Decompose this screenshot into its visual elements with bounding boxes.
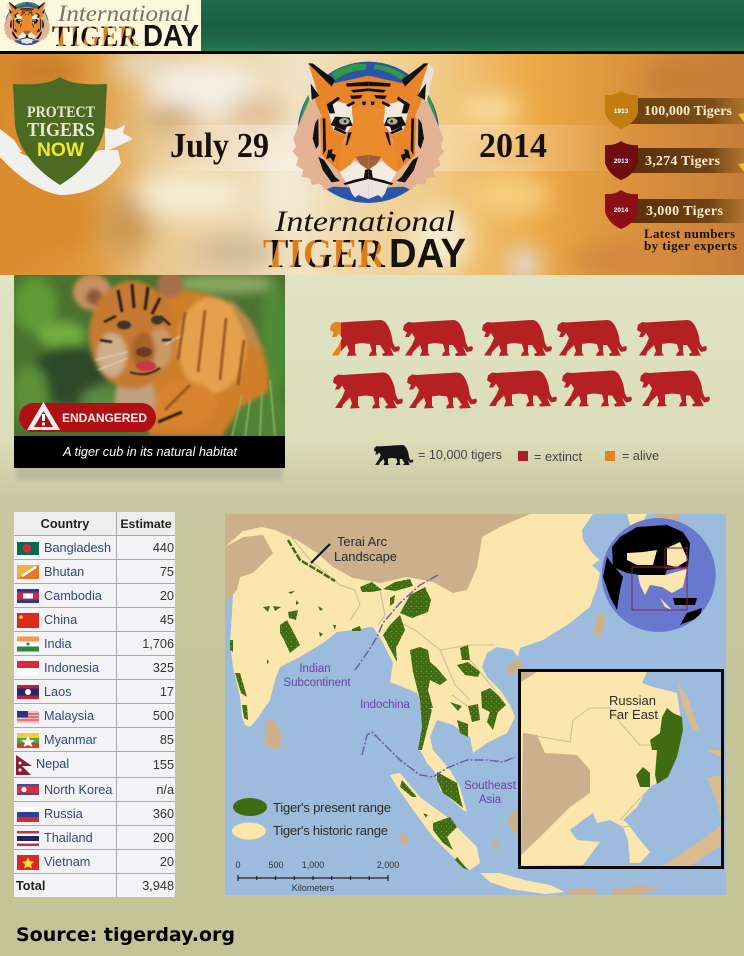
row: Nepal: Nepal [36,757,69,771]
tiger cub photo [12,272,292,442]
table: tiger estimates by country [14,512,175,897]
row: Total [16,879,174,893]
row: Indonesia: Indonesia [44,661,100,675]
photo shadow [16,466,283,480]
ribbon [0,125,133,195]
row: Thailand [17,831,174,846]
scale bar: 0 [235,860,241,870]
row: Malaysia: 500 [153,709,174,723]
row: Laos [17,685,174,699]
table header: Country [41,517,89,531]
logo wordmark: DAY [143,18,199,53]
label: Southeast Asia: Southeast [464,780,517,792]
row: India: 1,706 [142,637,174,651]
inset map: Russian Far East: Russian [609,693,656,708]
shield: Protect Tigers Now [0,77,133,195]
row: Bhutan [17,565,174,579]
row: Bangladesh: Bangladesh [44,541,111,555]
row: Malaysia: Malaysia [44,709,95,723]
icon: small tiger head [4,2,50,45]
label: Terai Arc Landscape: Terai Arc [337,534,388,549]
row: Total: Total [16,879,45,893]
inset map: Russian Far East: Far East [609,707,658,722]
row: Laos: Laos [44,685,72,699]
note: latest numbers: Latest numbers [644,226,735,241]
scale bar [236,862,399,891]
badge: endangered: ENDANGERED [62,411,147,425]
inset tiger range [650,708,683,784]
locator globe [602,518,716,632]
row: Russia [17,807,174,822]
badge: 1913 [605,91,744,129]
caption bar: A tiger cub in its natural habitat [62,444,238,459]
row: Bhutan: Bhutan [44,565,84,579]
row: North Korea: North Korea [44,783,113,797]
row: China: 45 [160,613,174,627]
row: Vietnam [17,855,174,870]
row: China [17,613,174,628]
logo wordmark: TIGER [52,20,138,53]
row: China: China [44,613,78,627]
pictogram legend: = 10,000 tigers [418,447,502,462]
note: latest numbers [644,229,737,252]
row: Laos: 17 [160,685,174,699]
logo wordmark: International [57,1,190,26]
inset map: Russian Far East [520,670,722,868]
row: Malaysia [17,709,174,723]
map legend [232,798,391,840]
badge: 1913: 100,000 Tigers [644,104,733,119]
badge: 1913: 1913 [614,108,629,115]
pictogram: tiger population [330,320,710,408]
shield: Protect Tigers Now: NOW [37,140,84,161]
map legend: Tiger's present range [273,800,391,815]
label: Indian Subcontinent: Indian [299,663,331,675]
inset borders [530,708,655,827]
row: Cambodia: 20 [160,589,174,603]
label: Southeast Asia [464,780,516,803]
map panel [225,514,726,895]
row: Indonesia: 325 [153,661,174,675]
ocean [225,514,726,895]
label: Terai Arc Landscape [311,534,397,564]
dashed region boundaries [355,575,515,777]
scale bar: 1,000 [302,860,324,870]
row: Nepal: 155 [153,758,174,772]
banner title: International [274,205,455,238]
banner title: DAY [389,230,466,276]
banner title: TIGER [263,230,385,276]
row: India: India [44,637,72,651]
row: Cambodia [17,589,174,603]
row: Vietnam: Vietnam [44,855,90,869]
row: North Korea: n/a [156,783,175,797]
badge: 2013 [605,141,744,180]
year: 2014: 2014 [479,126,547,165]
note: latest numbers: by tiger experts [644,238,737,253]
row: Russia: Russia [44,807,84,821]
shield: Protect Tigers Now: TIGERS [27,119,95,141]
scale bar: 500 [268,860,284,870]
caption bar [14,436,285,468]
label: Indian Subcontinent: Subcontinent [283,677,351,689]
banner title [264,210,466,268]
table header [41,517,172,531]
row: Cambodia: Cambodia [44,589,103,603]
map legend: Tiger's historic range [273,823,388,838]
row: Bangladesh: 440 [153,541,174,555]
badge: 2013: 3,274 Tigers [645,154,721,169]
label: Southeast Asia: Asia [479,794,502,806]
row: Myanmar [17,733,174,748]
badge: 2013: 2013 [614,158,629,165]
row: Bhutan: 75 [160,565,174,579]
banner background [0,53,744,283]
shield: Protect Tigers Now: PROTECT [27,104,95,121]
date: July 29: July 29 [170,126,269,165]
row: India [17,636,174,652]
icon: black tiger [374,445,413,465]
badge: 2014: 3,000 Tigers [646,204,724,219]
tiger icon row 2 [333,370,710,408]
row: North Korea [17,783,175,797]
label: Terai Arc Landscape: Landscape [334,549,397,564]
badge: endangered [19,402,156,432]
row: Vietnam: 20 [160,855,174,869]
country borders [288,533,495,715]
historic range land [225,514,647,894]
row: Nepal [16,755,174,775]
non-range land [225,514,680,895]
banner panel [0,53,744,283]
badge: 2014 [605,190,744,229]
photo panel: tiger cub [12,272,292,480]
table header: Estimate [120,517,172,531]
row: Thailand: 200 [153,831,174,845]
label: Indochina: Indochina [360,699,411,711]
row: Bangladesh [17,541,174,555]
pictogram legend: = alive [622,448,659,463]
header logo: International Tiger Day [0,0,201,53]
row: Myanmar: Myanmar [44,733,98,747]
inset land [521,672,683,866]
row: Russia: 360 [153,807,174,821]
pictogram legend [374,445,659,465]
row: Thailand: Thailand [44,831,93,845]
label: Indian Subcontinent [284,663,350,686]
pictogram legend: = extinct [534,449,582,464]
icon: large tiger head [293,62,444,203]
row: Myanmar: 85 [160,733,174,747]
source line: Source: tigerday.org [16,924,235,946]
header bar [0,0,744,54]
tiger icon row 1 [330,320,707,356]
scale bar: 2,000 [377,860,399,870]
logo wordmark [52,1,199,53]
scale bar: Kilometers [292,883,335,893]
row: Indonesia [17,661,174,675]
present range green patches [230,540,506,870]
row: Total: 3,948 [142,879,174,893]
badge: 2014: 2014 [614,207,629,214]
